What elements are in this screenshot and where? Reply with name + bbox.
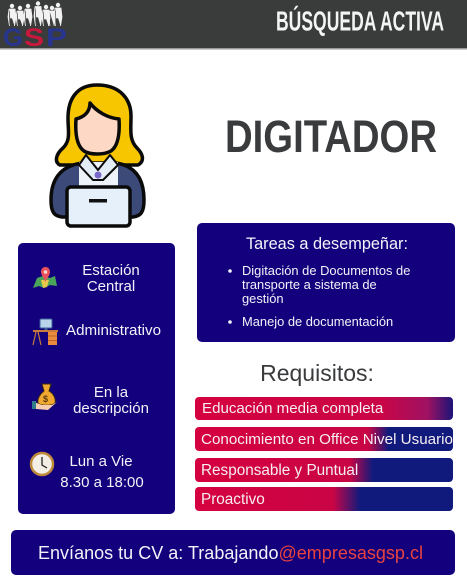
bar: office: Conocimiento en Office Nivel Usuario [201, 431, 453, 448]
tasks list: Manejo de documentación [242, 314, 393, 329]
icon: money bag: $ [43, 394, 48, 404]
panel: job details [18, 243, 175, 514]
title: DIGITADOR: DIGITADOR [225, 111, 437, 162]
shirt [79, 162, 118, 190]
bar: office [195, 427, 453, 451]
body [51, 163, 144, 217]
schedule text: Lun a Vie [69, 453, 133, 470]
bar: proactive [195, 487, 453, 511]
salary text: En la [94, 384, 129, 401]
header bar [0, 0, 467, 52]
bar: education [195, 397, 453, 420]
panel: tasks [197, 223, 455, 342]
bar: responsible: Responsable y Puntual [201, 462, 358, 479]
location text: Estación [82, 262, 140, 279]
salary text: descripción [73, 400, 149, 417]
icon: woman with laptop [51, 85, 144, 226]
schedule text: 8.30 a 18:00 [60, 474, 144, 491]
bar: education: Educación media completa [202, 400, 384, 417]
footer: contact [11, 530, 455, 575]
icon: desk [33, 319, 58, 345]
tasks list: gestión [242, 291, 284, 306]
tasks list: Digitación de Documentos de [242, 263, 410, 278]
requirement bars [195, 397, 453, 511]
badge [94, 172, 102, 178]
footer: contact: Envíanos tu CV a: Trabajando@empresasgsp.cl [38, 542, 423, 563]
logo: GSP: G [3, 24, 23, 52]
tasks list: transporte a sistema de [242, 277, 377, 292]
tasks heading: Tareas a desempeñar: [246, 235, 408, 253]
location text: Central [87, 278, 135, 295]
bar: proactive: Proactivo [201, 491, 265, 508]
icon: money bag [32, 384, 57, 410]
area text: Administrativo [66, 322, 161, 339]
face [76, 103, 119, 154]
logo: GSP [3, 2, 67, 52]
laptop [67, 187, 130, 226]
heading: requisitos: Requisitos: [260, 360, 374, 386]
tasks list [228, 263, 410, 329]
hair [56, 85, 142, 165]
logo: GSP: S [24, 24, 44, 52]
icon: clock [31, 453, 53, 475]
icon: map pin [33, 267, 57, 288]
bar: responsible [195, 458, 453, 482]
logo: GSP: P [46, 24, 67, 52]
